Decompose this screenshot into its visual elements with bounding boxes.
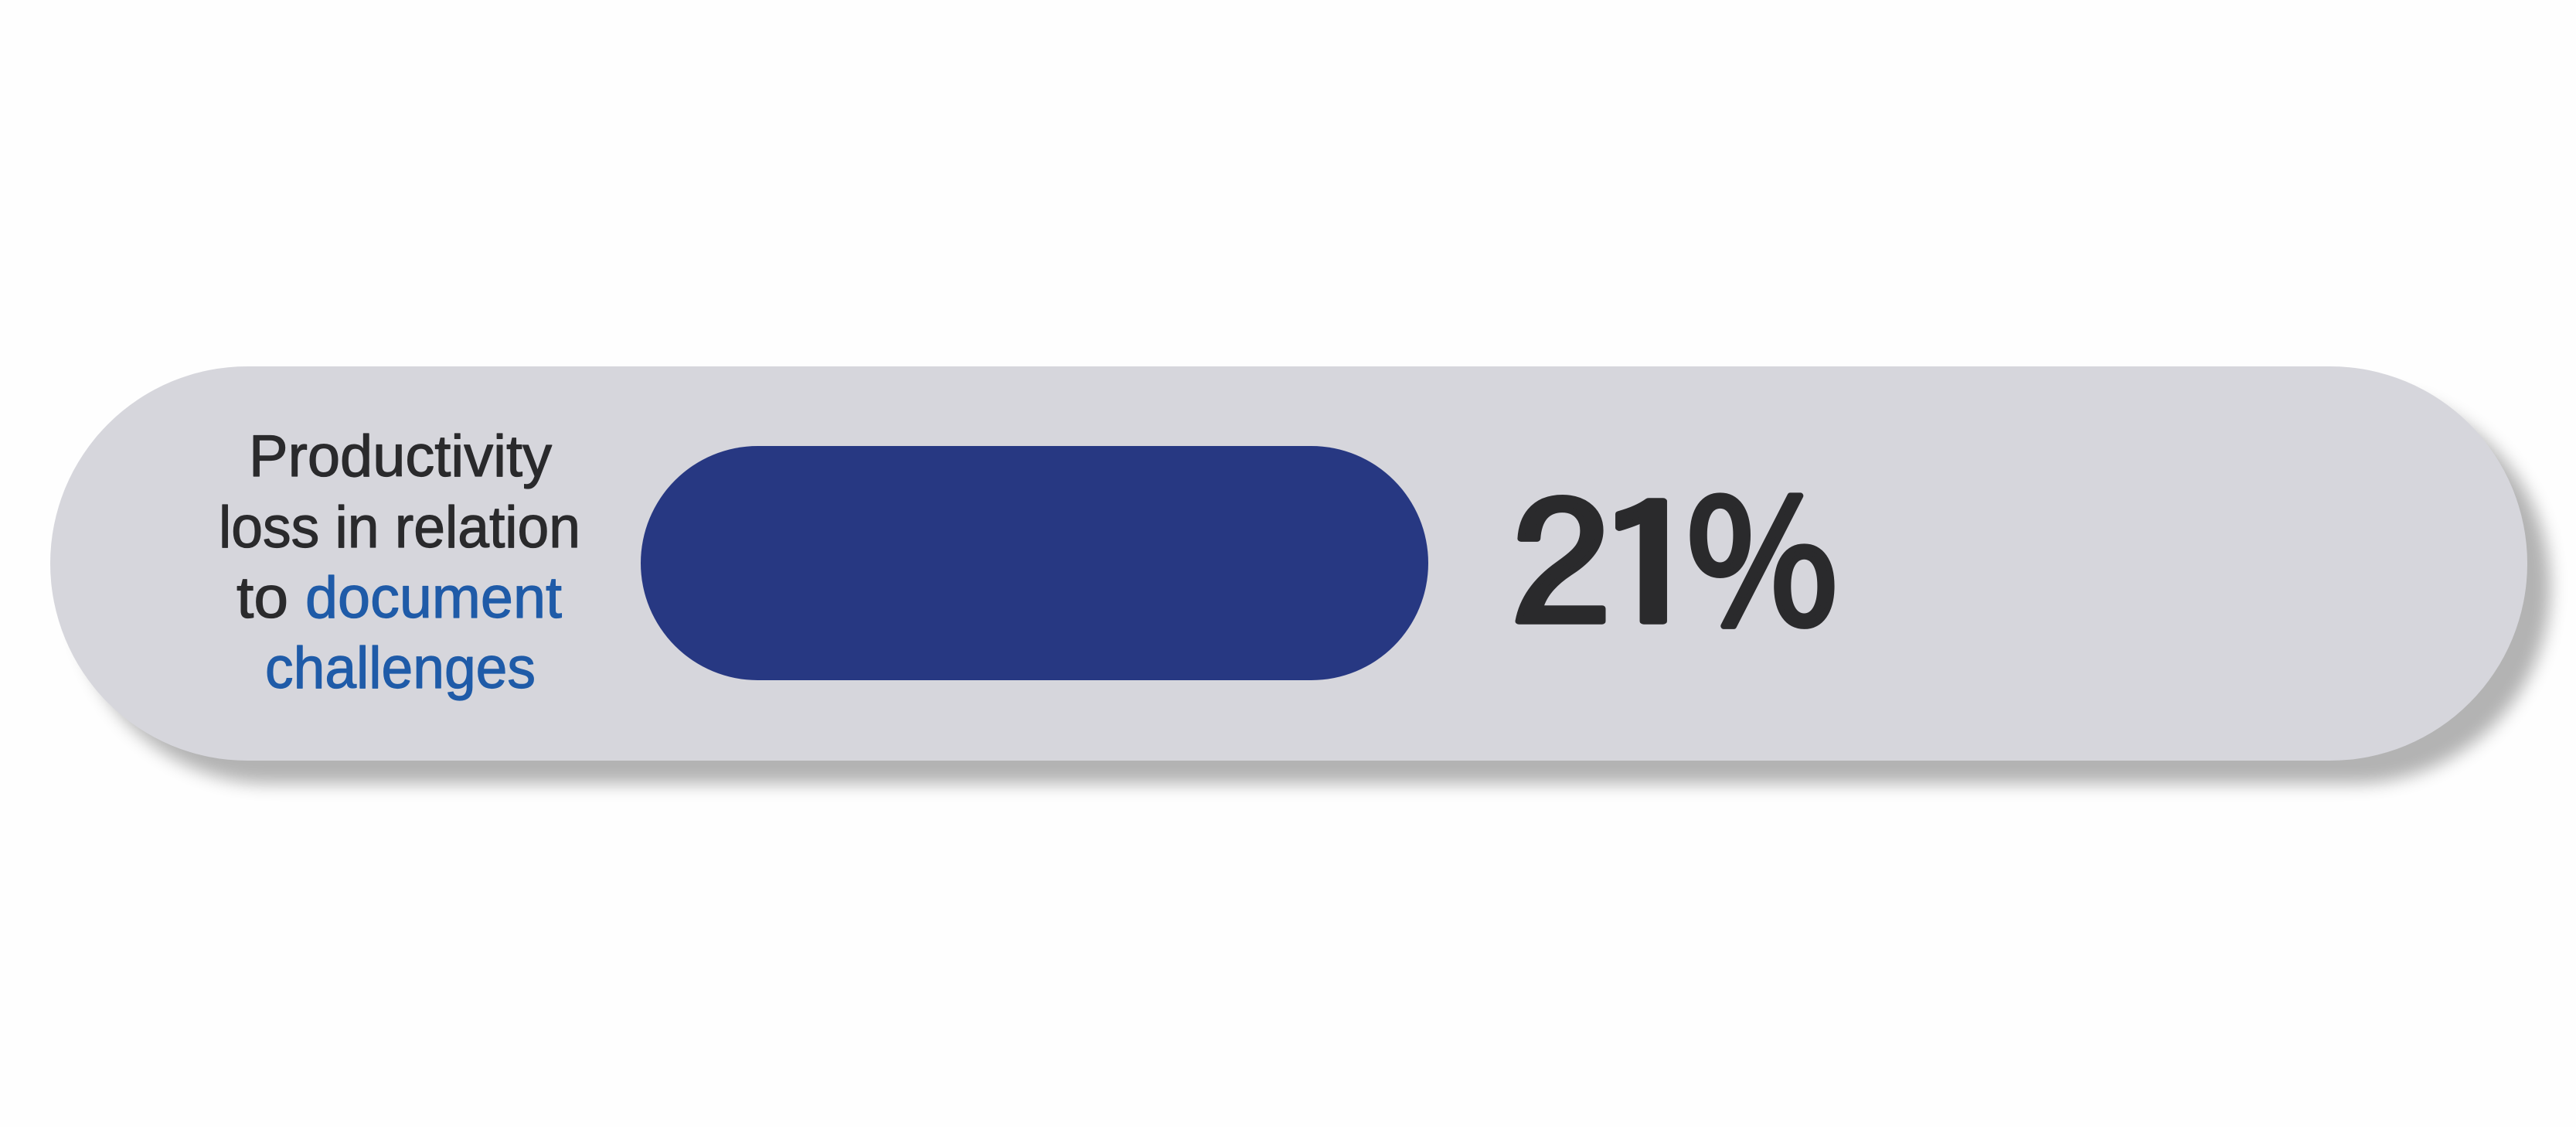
value: 21%: % <box>1686 424 1838 673</box>
label: productivity loss in relation to document challenges: Productivity <box>249 424 552 489</box>
label: productivity loss in relation to document challenges: to <box>237 565 288 631</box>
label: productivity loss in relation to document challenges: document <box>305 565 562 631</box>
value: 21%: 1 <box>1592 479 1708 651</box>
label: productivity loss in relation to document challenges <box>219 424 580 701</box>
value: 21% <box>1511 424 1838 673</box>
label: productivity loss in relation to document challenges: loss in relation <box>219 495 580 560</box>
bar: productivity loss value <box>641 446 1428 680</box>
label: productivity loss in relation to document challenges: challenges <box>265 635 536 701</box>
panel: grey rounded pill with shadow <box>50 366 2527 761</box>
value: 21%: 2 <box>1511 479 1611 651</box>
